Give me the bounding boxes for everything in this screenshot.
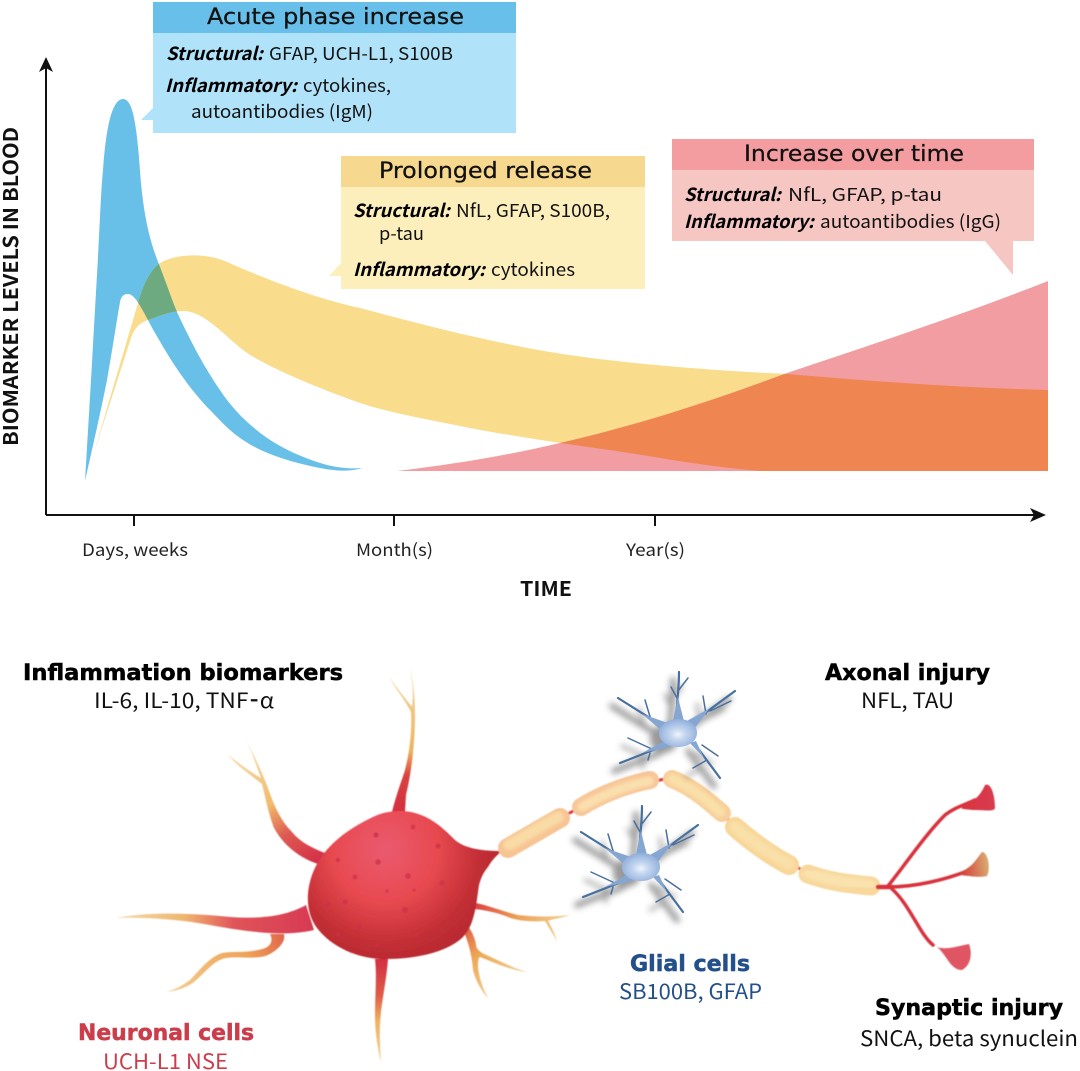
x axis title: TIME bbox=[520, 573, 572, 602]
x axis bbox=[46, 514, 1036, 516]
dendrite: lower left bbox=[166, 934, 284, 992]
myelin segment 5 bbox=[808, 873, 871, 886]
cell body bbox=[308, 811, 502, 959]
callout text: Inflammatory: bbox=[684, 208, 815, 234]
callout text: Structural: bbox=[684, 181, 782, 207]
label: months: Month(s) bbox=[356, 536, 433, 561]
illustration: glial cell lower bbox=[575, 806, 698, 920]
callout text: Inflammatory: bbox=[165, 72, 298, 98]
axon links bbox=[566, 779, 802, 870]
y axis bbox=[45, 66, 47, 515]
area: acute phase curve (blue) bbox=[85, 99, 362, 481]
label: synaptic injury bbox=[860, 996, 1078, 1053]
callout body bbox=[329, 187, 645, 289]
label: inflammation biomarkers: Inflammation biomarkers bbox=[23, 661, 343, 686]
tick: years bbox=[654, 515, 656, 526]
label: inflammation biomarkers: IL-6, IL-10, TNF⁃α bbox=[94, 685, 274, 715]
label: axonal injury: NFL, TAU bbox=[861, 685, 954, 715]
terminal bulb: middle bbox=[960, 852, 989, 877]
callout text: Inflammatory: bbox=[353, 256, 486, 282]
callout text: cytokines, bbox=[303, 72, 391, 98]
callout body bbox=[672, 170, 1034, 275]
callout text bbox=[353, 197, 610, 282]
callout text: NfL, GFAP, S100B, bbox=[456, 197, 610, 223]
callout heading: Increase over time bbox=[744, 142, 964, 167]
label: years: Year(s) bbox=[625, 536, 685, 561]
tick: months bbox=[393, 515, 395, 526]
terminal branches bbox=[878, 800, 975, 945]
callout header bbox=[341, 156, 645, 187]
terminal bulb: lower bbox=[937, 944, 971, 970]
area: blue and yellow overlap bbox=[138, 264, 177, 320]
callout text: Structural: bbox=[353, 197, 451, 223]
soma spots bbox=[326, 825, 445, 947]
dendrite: top bbox=[389, 668, 415, 812]
illustration: glial cell upper bbox=[612, 672, 735, 786]
area: increase over time curve (red) bbox=[397, 281, 1048, 471]
dendrite: upper left bbox=[228, 740, 325, 864]
callout: prolonged release bbox=[329, 156, 645, 289]
dendrite: left bbox=[116, 905, 314, 933]
callout text: GFAP, UCH-L1, S100B bbox=[269, 40, 453, 66]
callout body bbox=[141, 33, 516, 133]
callout text: NfL, GFAP, p-tau bbox=[788, 181, 942, 207]
label: neuronal cells bbox=[78, 1021, 254, 1071]
myelin segment 1 bbox=[508, 817, 560, 848]
chart: biomarker levels over time bbox=[0, 57, 1048, 602]
tick: days, weeks bbox=[133, 515, 135, 526]
area: prolonged release curve (yellow) bbox=[92, 255, 1048, 471]
label: inflammation biomarkers bbox=[23, 661, 343, 715]
label: glial cells: SB100B, GFAP bbox=[619, 976, 762, 1006]
label: synaptic injury: SNCA, beta synuclein bbox=[860, 1023, 1078, 1053]
callout header bbox=[153, 2, 516, 33]
terminal bulb: upper bbox=[962, 785, 995, 810]
label: axonal injury bbox=[825, 661, 990, 715]
myelin segment 3 bbox=[672, 779, 722, 813]
label: synaptic injury: Synaptic injury bbox=[875, 996, 1063, 1021]
label: neuronal cells: Neuronal cells bbox=[78, 1021, 254, 1046]
y axis arrow bbox=[39, 57, 53, 72]
callout: acute phase increase bbox=[141, 2, 516, 133]
myelin segment 2 bbox=[581, 780, 650, 807]
x axis arrow bbox=[1030, 508, 1046, 522]
callout text bbox=[165, 40, 453, 124]
label: days, weeks: Days, weeks bbox=[82, 536, 188, 561]
dendrite: lower right bbox=[462, 924, 527, 999]
callout text: autoantibodies (IgG) bbox=[820, 208, 1001, 234]
label: axonal injury: Axonal injury bbox=[825, 661, 990, 686]
myelin segment 4 bbox=[735, 827, 789, 865]
dendrite: bottom bbox=[375, 959, 388, 1063]
area: yellow and red overlap bbox=[560, 374, 1048, 471]
callout: increase over time bbox=[672, 139, 1034, 275]
callout text: Structural: bbox=[166, 40, 264, 66]
callout text: cytokines bbox=[491, 256, 575, 282]
callout heading: Acute phase increase bbox=[207, 5, 464, 30]
callout heading: Prolonged release bbox=[379, 159, 592, 184]
callout text bbox=[684, 181, 1001, 234]
label: glial cells: Glial cells bbox=[630, 952, 750, 977]
dendrite: right bbox=[474, 903, 570, 941]
label: glial cells bbox=[619, 952, 762, 1006]
callout text: p-tau bbox=[379, 220, 424, 246]
callout header bbox=[672, 139, 1034, 170]
callout text: autoantibodies (IgM) bbox=[191, 98, 373, 124]
illustration: neuron bbox=[116, 668, 995, 1063]
